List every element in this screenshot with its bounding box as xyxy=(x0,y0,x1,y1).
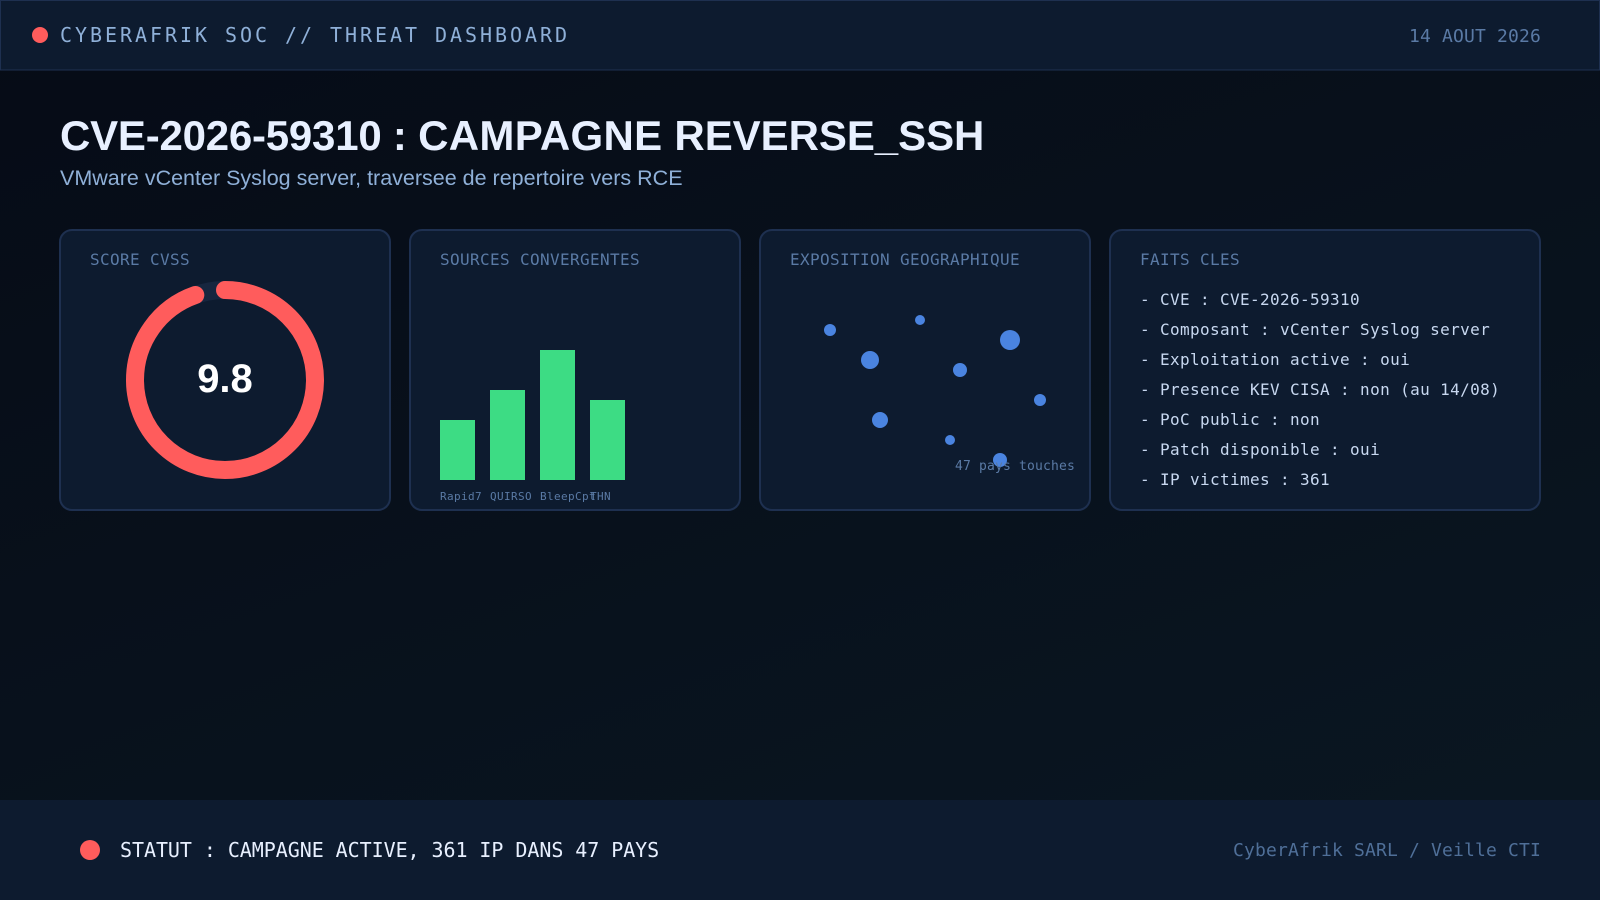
footer credit: CyberAfrik SARL / Veille CTI xyxy=(1233,840,1541,861)
bar chart: BleepCpt xyxy=(540,490,596,503)
footer bar xyxy=(0,800,1600,900)
panel heading: exposition: EXPOSITION GEOGRAPHIQUE xyxy=(790,250,1020,269)
bar chart: THN xyxy=(590,490,611,503)
panel: sources convergentes xyxy=(409,229,741,511)
bar chart: Rapid7 xyxy=(440,490,482,503)
facts list: - Presence KEV CISA : non (au 14/08) xyxy=(1140,380,1500,399)
header title: CYBERAFRIK SOC // THREAT DASHBOARD xyxy=(60,23,570,47)
status text: STATUT : CAMPAGNE ACTIVE, 361 IP DANS 47 PAYS xyxy=(120,838,659,862)
facts list xyxy=(1140,290,1500,489)
score value: 9.8 xyxy=(197,357,253,401)
facts list: - IP victimes : 361 xyxy=(1140,470,1330,489)
icon: status dot xyxy=(32,27,48,43)
panel heading: sources: SOURCES CONVERGENTES xyxy=(440,250,640,269)
subtitle: VMware vCenter Syslog server, traversee de repertoire vers RCE xyxy=(60,166,683,190)
bar chart: QUIRSO xyxy=(490,490,532,503)
bar chart xyxy=(440,350,625,503)
panel heading: faits cles: FAITS CLES xyxy=(1140,250,1240,269)
icon: status dot xyxy=(80,840,100,860)
facts list: - PoC public : non xyxy=(1140,410,1320,429)
panel heading: score CVSS: SCORE CVSS xyxy=(90,250,190,269)
map caption: 47 pays touches xyxy=(955,459,1075,474)
header date: 14 AOUT 2026 xyxy=(1409,26,1541,47)
title: CVE-2026-59310 : CAMPAGNE REVERSE_SSH xyxy=(60,112,984,159)
panel: exposition geographique xyxy=(759,229,1091,511)
facts list: - CVE : CVE-2026-59310 xyxy=(1140,290,1360,309)
panel: faits cles xyxy=(1109,229,1541,511)
facts list: - Patch disponible : oui xyxy=(1140,440,1380,459)
facts list: - Exploitation active : oui xyxy=(1140,350,1410,369)
panel: score CVSS xyxy=(59,229,391,511)
header bar xyxy=(0,0,1600,70)
facts list: - Composant : vCenter Syslog server xyxy=(1140,320,1490,339)
